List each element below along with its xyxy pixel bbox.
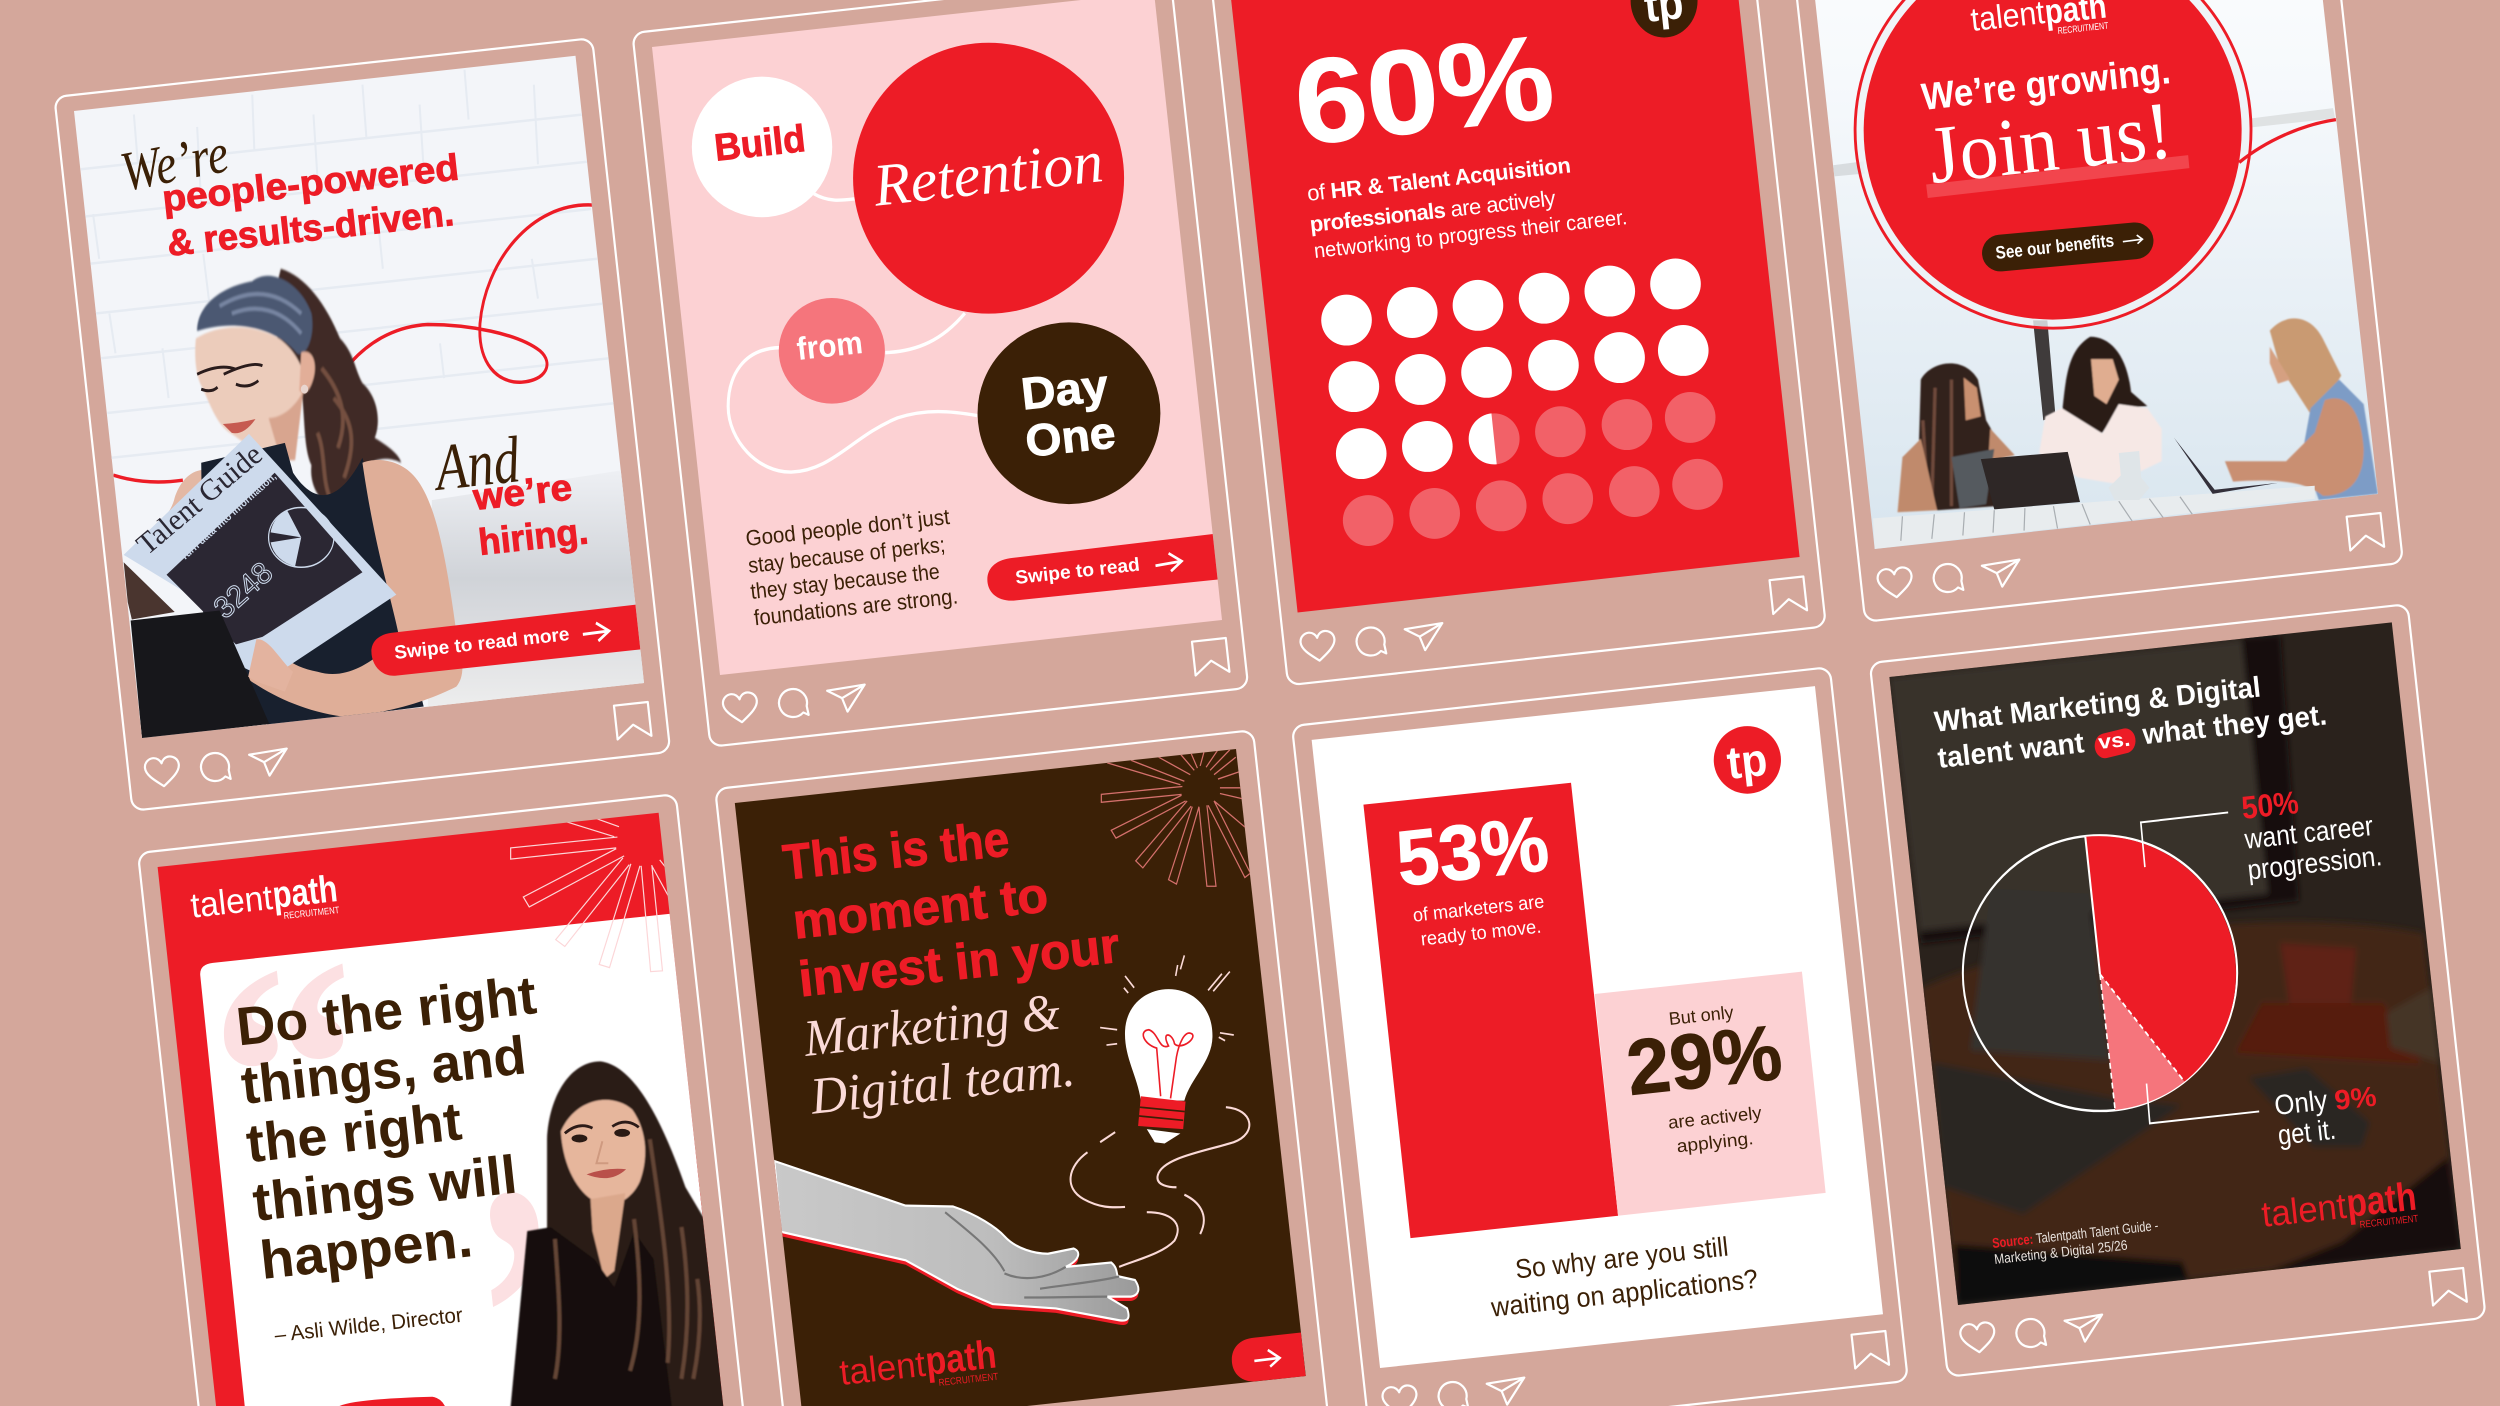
panel: dot chart [1231, 0, 1800, 612]
chart: coral dots [1343, 392, 1723, 546]
heading: moment to [790, 866, 1051, 950]
heading [780, 810, 1122, 1007]
squiggles [1071, 1107, 1249, 1267]
button text: See our benefits [1995, 230, 2115, 263]
logo: path [2344, 1175, 2419, 1226]
logo text: tp [1724, 733, 1770, 789]
text: Build: Build [712, 118, 807, 170]
heading: What Marketing & Digital [1933, 672, 2262, 739]
panel: dark desk photo with pie [1889, 622, 2461, 1305]
quote text [233, 965, 539, 1291]
heading: join us: Join us! [1924, 84, 2177, 201]
logo: RECRUITMENT [2057, 21, 2109, 37]
post card 5: quote [138, 794, 744, 1406]
attribution: – Asli Wilde, Director [273, 1304, 464, 1347]
body text: they stay because the [749, 559, 941, 604]
icon: bookmark [1770, 576, 1807, 614]
icon: bookmark [1192, 638, 1229, 675]
icon: send [1405, 623, 1445, 652]
italic heading: Marketing & [800, 983, 1063, 1068]
arrow [1156, 553, 1182, 571]
stat description: professionals are actively [1308, 185, 1557, 237]
quote text: Do the right [233, 965, 539, 1057]
quote text: happen. [257, 1208, 475, 1291]
callout lines [2141, 812, 2259, 1123]
closing question: waiting on applications? [1489, 1264, 1759, 1323]
callout: 9 percent: 9% [2333, 1081, 2378, 1116]
source [1991, 1217, 2159, 1267]
sunburst [511, 818, 670, 972]
callout: 50 percent: 50% [2240, 784, 2300, 826]
logo: talent [2259, 1185, 2348, 1235]
frame [715, 730, 1331, 1406]
frame and action icons [1292, 667, 1908, 1406]
frame and action icons [632, 0, 1248, 747]
frame and action icons [1210, 0, 1826, 685]
icon: heart [1382, 1384, 1419, 1406]
hand [774, 1161, 1138, 1325]
arrow [2123, 235, 2142, 244]
icon: send [249, 749, 289, 778]
heading: we're growing: We’re growing. [1919, 50, 2173, 119]
icon: comment [1355, 626, 1386, 657]
bar: 53 percent [1363, 783, 1618, 1238]
post card 4: join us [1780, 0, 2433, 622]
icon: heart [144, 755, 181, 788]
italic heading [800, 983, 1077, 1126]
frame and action icons [1870, 604, 2486, 1377]
frame and action icons [1787, 0, 2403, 622]
frame and action icons [54, 38, 670, 811]
logo: RECRUITMENT [283, 905, 340, 922]
text: hiring: hiring. [476, 510, 590, 563]
callout: 50 percent [2240, 784, 2383, 886]
panel: dark with bulb and hand [734, 749, 1306, 1406]
decorative swirl [113, 205, 593, 482]
chart: pie [1963, 835, 2237, 1111]
panel: bar comparison [1312, 686, 1883, 1368]
text: One: One [1023, 406, 1118, 467]
logo [837, 1333, 999, 1393]
icon: bookmark [2347, 513, 2384, 550]
sunburst [1101, 750, 1250, 886]
logo: RECRUITMENT [938, 1372, 999, 1389]
icon: heart [1300, 630, 1337, 663]
text: Retention: Retention [869, 128, 1106, 219]
logo: path [270, 868, 340, 917]
post card 7: 53 vs 29 percent [1292, 667, 1908, 1406]
callout: 9 percent: get it. [2276, 1114, 2337, 1151]
panel: bubbles [652, 0, 1222, 675]
heading: what they get. [2140, 699, 2328, 751]
photo: team at table with join us circle [1815, 0, 2378, 549]
post card 6: invest in your team [715, 730, 1328, 1406]
panel: quote background [158, 812, 724, 1406]
callout: 9 percent [2273, 1081, 2378, 1151]
icon: bookmark [1852, 1331, 1889, 1368]
post card 2: build retention [620, 0, 1273, 758]
logo [1969, 0, 2109, 38]
icon: comment [1932, 563, 1963, 593]
text: And: And [429, 423, 524, 505]
photo: portrait of Asli Wilde [509, 1061, 737, 1406]
stat: 53%: 53% [1392, 799, 1553, 903]
icon: send [827, 685, 867, 714]
italic heading: Digital team. [807, 1040, 1077, 1126]
stat description: are actively [1667, 1103, 1763, 1133]
arrow [1254, 1350, 1280, 1367]
stat: 29%: 29% [1622, 1008, 1786, 1112]
body text [744, 504, 959, 630]
bubble: from [779, 298, 885, 404]
stat description [1412, 892, 1545, 950]
icon: comment [2015, 1318, 2046, 1348]
quote text: things, and [238, 1025, 529, 1116]
heading: We're: We’re [116, 122, 233, 204]
post card 1: people-powered [40, 20, 693, 816]
post card 3: 60 percent [1212, 0, 1826, 686]
chart: partial dot [1469, 413, 1497, 464]
bubble: Retention [853, 43, 1124, 314]
icon: comment [778, 688, 809, 718]
body text: stay because of perks; [747, 532, 946, 578]
button text: Swipe to read more [393, 624, 571, 664]
logo [189, 868, 340, 926]
logo: path [923, 1333, 999, 1384]
stat description: ready to move. [1420, 917, 1542, 950]
arrow [583, 623, 609, 641]
bubble: Build [692, 77, 832, 217]
chart: white dots [1321, 258, 1709, 479]
icon: heart [1959, 1321, 1996, 1354]
heading: people-powered: people-powered [160, 147, 461, 219]
quote text: the right [243, 1091, 465, 1174]
stat description: applying. [1676, 1128, 1754, 1156]
icon: send [1982, 560, 2022, 589]
body text: Good people don’t just [744, 504, 951, 551]
bar: 29 percent [1595, 972, 1826, 1216]
button text: Swipe to read [1014, 555, 1141, 589]
quote text: things will [250, 1145, 520, 1233]
stat description [1306, 152, 1628, 263]
frame [138, 794, 754, 1406]
join us circle ring [1855, 0, 2251, 328]
icon: light bulb [1100, 955, 1234, 1144]
stat description: of marketers are [1412, 892, 1545, 927]
label: but only: But only [1668, 1002, 1735, 1029]
vs label: vs. [2097, 729, 2131, 754]
bubble: Day One [978, 322, 1160, 504]
icon: comment [200, 752, 231, 782]
icon: comment [1437, 1381, 1468, 1406]
post card 8: pie chart [1860, 600, 2500, 1377]
stat description: of HR & Talent Acquisition [1306, 152, 1572, 206]
stat: 60%: 60% [1288, 10, 1560, 171]
heading: talent want [1936, 727, 2086, 775]
text: we're: we’re [470, 467, 574, 518]
stat description [1667, 1103, 1763, 1156]
text: Day: Day [1019, 359, 1111, 420]
closing question [1489, 1232, 1759, 1323]
heading: results-driven: & results-driven. [165, 192, 456, 264]
callout: 9 percent: Only [2273, 1084, 2329, 1121]
callout: 50 percent: progression. [2246, 840, 2383, 886]
stat description: networking to progress their career. [1313, 206, 1628, 263]
logo: talent [189, 878, 275, 926]
callout: 50 percent: want career [2242, 810, 2375, 855]
decorative quote mark: open: “ [196, 894, 381, 1247]
logo badge [1714, 726, 1781, 794]
book subtitle: Turn data into information, [179, 471, 279, 563]
vs pill [2105, 741, 2125, 746]
button: see our benefits [2000, 241, 2135, 253]
photo: woman reading talent guide [74, 56, 644, 738]
logo: talent [837, 1343, 927, 1393]
logo: RECRUITMENT [2359, 1214, 2419, 1231]
heading [1933, 672, 2328, 775]
source: Marketing & Digital 25/26 [1993, 1237, 2128, 1267]
body text: foundations are strong. [753, 583, 959, 630]
heading: invest in your [796, 917, 1122, 1007]
heading: This is the [780, 810, 1012, 891]
join us circle [1864, 0, 2242, 320]
icon: heart [1877, 566, 1914, 599]
book stats: 3248 [208, 556, 279, 625]
closing question: So why are you still [1514, 1232, 1730, 1284]
text: from: from [795, 324, 864, 367]
source: Source: Talentpath Talent Guide - [1991, 1217, 2159, 1251]
icon: send [1487, 1378, 1527, 1406]
logo [2259, 1175, 2419, 1235]
icon: bookmark [614, 702, 651, 739]
icon: bookmark [2429, 1268, 2467, 1305]
book title: Talent Guide [130, 438, 269, 561]
icon: send [2064, 1315, 2105, 1344]
logo badge [1631, 0, 1698, 38]
icon: heart [722, 691, 759, 724]
